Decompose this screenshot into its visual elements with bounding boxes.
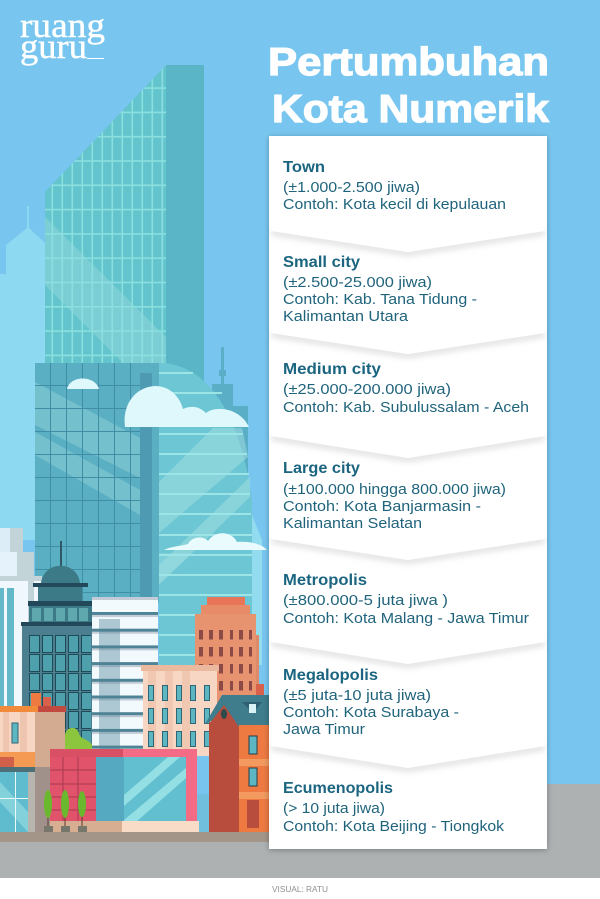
item: medium city: Medium city: [283, 361, 381, 378]
item: ecumenopolis: (> 10 juta jiwa): [283, 801, 385, 817]
item: ecumenopolis: Contoh: Kota Beijing - Tiongkok: [283, 819, 505, 835]
item: metropolis: Contoh: Kota Malang - Jawa Timur: [283, 611, 529, 627]
item: megalopolis: [283, 667, 459, 738]
salmon brick tower: [195, 597, 259, 709]
title: Kota Numerik: [272, 88, 549, 131]
logo: ruangguru: guru: [20, 27, 87, 66]
logo: ruangguru: ruang: [20, 6, 105, 45]
item: megalopolis: Contoh: Kota Surabaya -: [283, 705, 459, 721]
plant 2: [61, 790, 70, 832]
item: town: Contoh: Kota kecil di kepulauan: [283, 197, 506, 213]
item: medium city: [283, 361, 529, 416]
back tower with antenna: [212, 347, 248, 520]
item: megalopolis: Jawa Timur: [283, 722, 365, 738]
item: town: (±1.000-2.500 jiwa): [283, 180, 420, 196]
item: small city: Kalimantan Utara: [283, 309, 409, 325]
chevron dividers: [271, 222, 545, 769]
item: small city: Small city: [283, 254, 360, 271]
low cloud: [164, 533, 267, 550]
pale background tower: [0, 206, 45, 540]
item: large city: (±100.000 hingga 800.000 jiwa): [283, 482, 506, 498]
item: megalopolis: (±5 juta-10 juta jiwa): [283, 688, 431, 704]
white striped building: [92, 597, 158, 752]
item: ecumenopolis: Ecumenopolis: [283, 780, 393, 797]
item: megalopolis: Megalopolis: [283, 667, 378, 684]
logo: ruangguru: [20, 6, 105, 66]
item: ecumenopolis: [283, 780, 505, 835]
left pale building: [0, 528, 42, 706]
item: medium city: Contoh: Kab. Subulussalam - Aceh: [283, 400, 529, 416]
footer credit: VISUAL: RATU: [272, 885, 328, 894]
pink shop: [50, 749, 199, 832]
left shop: [0, 693, 66, 832]
title: Pertumbuhan: [268, 41, 549, 84]
large cloud: [125, 386, 249, 427]
title: [268, 41, 549, 131]
item: large city: Contoh: Kota Banjarmasin -: [283, 499, 481, 515]
teal glass office block: [35, 363, 159, 603]
small dome cloud: [67, 378, 99, 389]
plant 1: [44, 790, 53, 832]
item: large city: [283, 460, 506, 532]
curved teal building: [159, 363, 262, 665]
tall glass skyscraper: [45, 65, 204, 395]
white footer strip: [0, 878, 600, 899]
item: large city: Kalimantan Selatan: [283, 516, 422, 532]
item: large city: Large city: [283, 460, 360, 477]
item: small city: (±2.500-25.000 jiwa): [283, 275, 432, 291]
dark tower with dome: [21, 541, 100, 751]
item: small city: [283, 254, 477, 325]
item: medium city: (±25.000-200.000 jiwa): [283, 382, 451, 398]
item: small city: Contoh: Kab. Tana Tidung -: [283, 292, 477, 308]
item: metropolis: [283, 572, 529, 627]
beige apartment: [141, 665, 219, 756]
blue wall: [197, 794, 210, 832]
item: metropolis: (±800.000-5 juta jiwa ): [283, 593, 448, 609]
potted plants: [44, 790, 87, 832]
ground: [0, 784, 600, 878]
plant 3: [78, 791, 87, 832]
green bush: [65, 728, 92, 749]
item: metropolis: Metropolis: [283, 572, 367, 589]
red brick house: [205, 684, 269, 832]
item: town: Town: [283, 159, 325, 176]
panel: city categories: [269, 136, 547, 849]
item: town: [283, 159, 506, 213]
